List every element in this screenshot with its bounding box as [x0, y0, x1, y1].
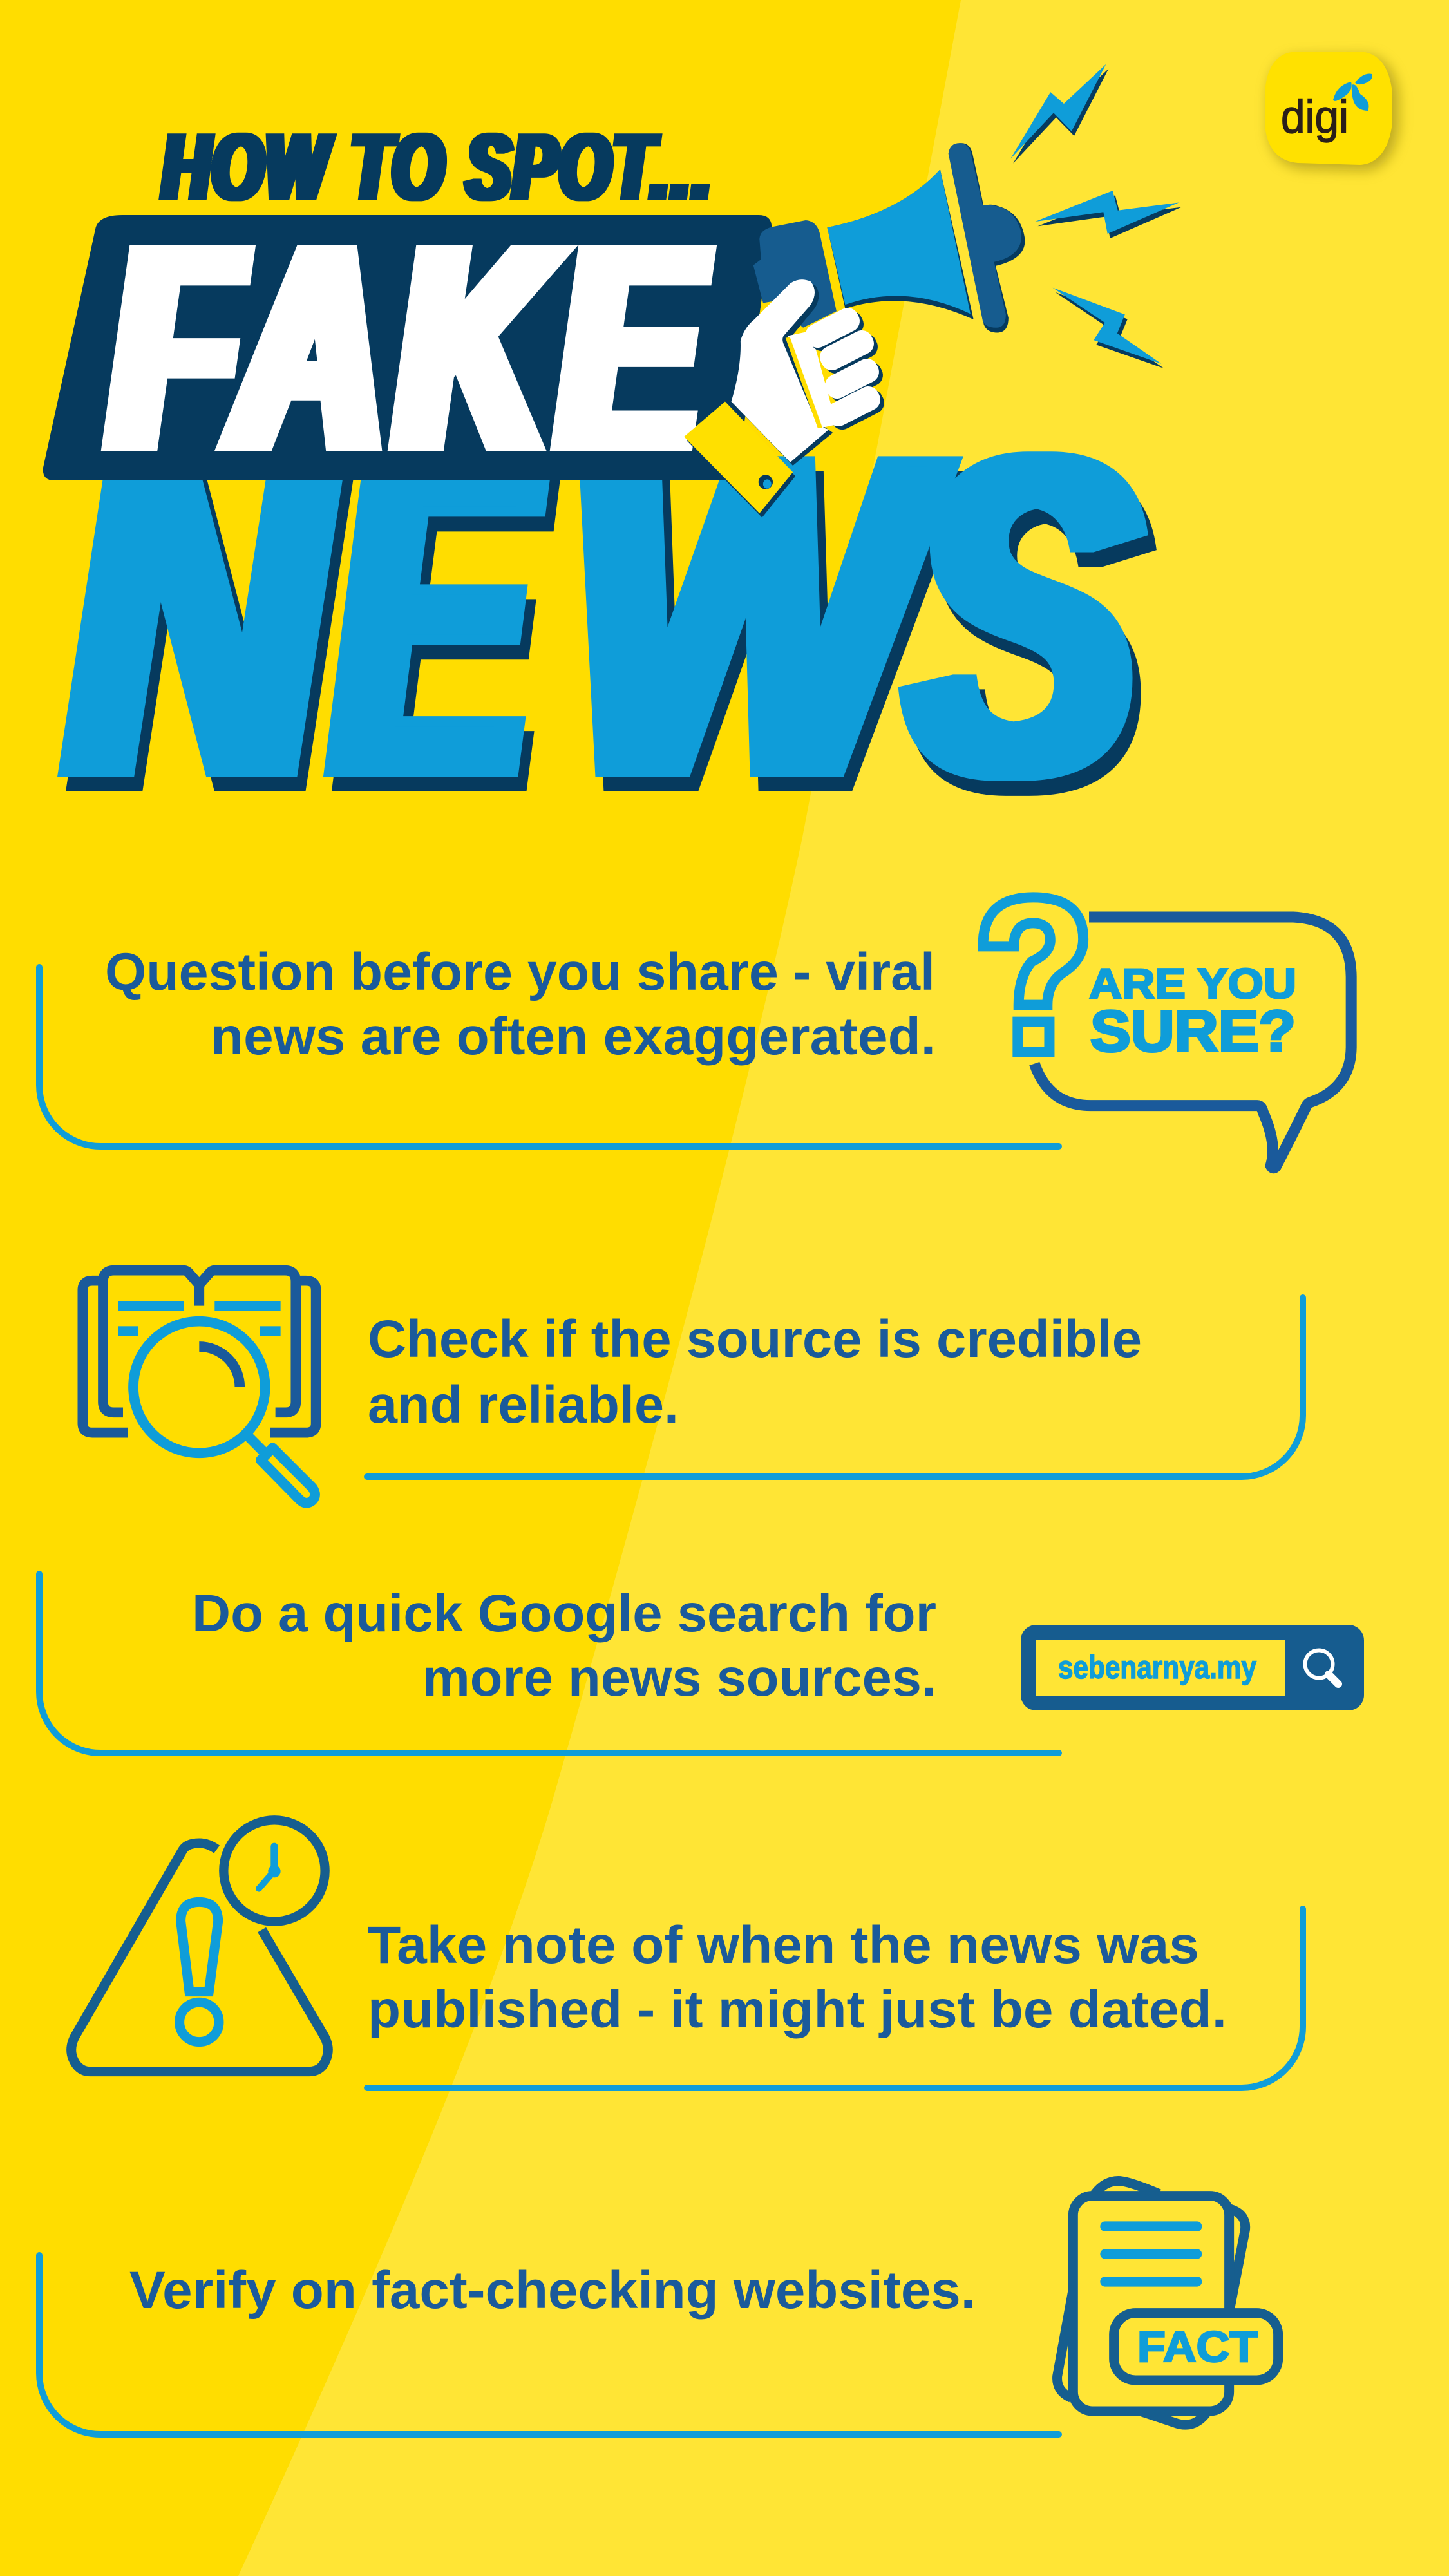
tip 4 text: published - it might just be dated.: [368, 1980, 1227, 2039]
title: NEWS: S: [910, 365, 1137, 867]
title: NEWS: S: [918, 379, 1146, 882]
title: FAKE: FAKE: [111, 188, 705, 508]
title: NEWS: N: [68, 365, 334, 867]
title: NEWS: W: [567, 365, 945, 867]
tip 5 frame: [39, 2255, 1059, 2434]
icon: are you sure speech bubble: [983, 897, 1351, 1168]
search text: sebenarnya.my: [1058, 1649, 1256, 1685]
tip 3 text: Do a quick Google search for: [192, 1584, 936, 1643]
megaphone body: [753, 143, 1025, 332]
icon: warning triangle and clock: [71, 1820, 328, 2072]
tip 4 text: Take note of when the news was: [368, 1916, 1199, 1975]
tip 4 text: [368, 1916, 1227, 2039]
icon: search bar: [1021, 1625, 1364, 1710]
tip 1 frame: [39, 967, 1059, 1146]
search glass: [1305, 1650, 1338, 1684]
illustration: megaphone and hand: [684, 143, 1025, 518]
bubble text: [1089, 960, 1296, 1064]
tip 2 text: Check if the source is credible: [368, 1310, 1142, 1368]
shirt cuff: [684, 402, 795, 518]
title: NEWS: W: [576, 379, 954, 882]
tip 2 frame: [367, 1298, 1303, 1477]
title: NEWS: N: [76, 379, 342, 882]
bubble text: SURE?: [1090, 999, 1296, 1064]
title: NEWS: E: [342, 379, 549, 882]
tip 3 frame: [39, 1574, 1059, 1753]
tip 1 text: Question before you share - viral: [105, 943, 935, 1001]
logo: digi: digi: [1281, 91, 1349, 143]
tip 2 text: [368, 1310, 1142, 1434]
tip 5 text: Verify on fact-checking websites.: [129, 2261, 976, 2320]
tip 1 text: [105, 943, 936, 1066]
icon: book and magnifier: [82, 1271, 316, 1503]
fact label: FACT: [1137, 2324, 1258, 2371]
bubble text: ARE YOU: [1089, 960, 1296, 1007]
fingers: [802, 304, 888, 433]
title: how to spot: HOW TO SPOT...: [162, 115, 714, 219]
tip 1 text: news are often exaggerated.: [211, 1007, 936, 1066]
title: NEWS: [68, 365, 1146, 882]
tip 2 text: and reliable.: [368, 1376, 679, 1434]
title panel: navy backing: [43, 215, 772, 480]
logo: digi: [1265, 52, 1399, 171]
tip 4 frame: [367, 1909, 1303, 2088]
tip 3 text: more news sources.: [422, 1649, 936, 1707]
title: NEWS: E: [334, 365, 540, 867]
tip 3 text: [192, 1584, 936, 1707]
hand: [731, 279, 888, 466]
icon: lightning bolts: [1010, 64, 1181, 368]
icon: fact document: [1057, 2181, 1278, 2425]
